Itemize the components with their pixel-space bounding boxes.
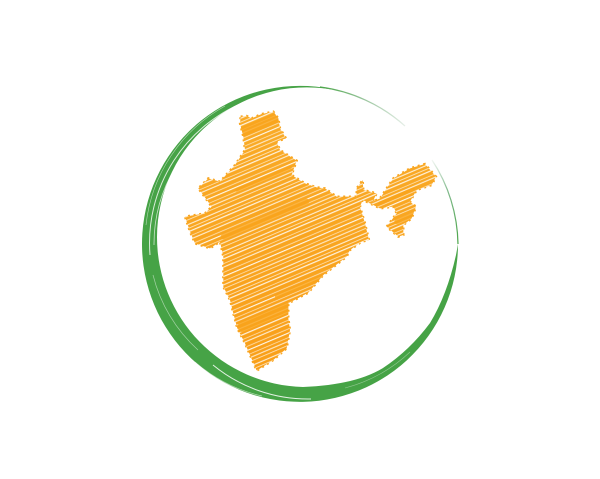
green brush circle — [142, 86, 458, 402]
scribbled edge — [185, 112, 436, 371]
thick crescent of the ring — [142, 86, 458, 402]
map fill — [185, 112, 436, 370]
thin fading right arc — [432, 160, 458, 244]
brush streaks — [146, 100, 410, 399]
thin fading top arc — [320, 87, 405, 126]
map of India, scribbled — [184, 110, 438, 372]
dense colour bands — [223, 118, 413, 327]
